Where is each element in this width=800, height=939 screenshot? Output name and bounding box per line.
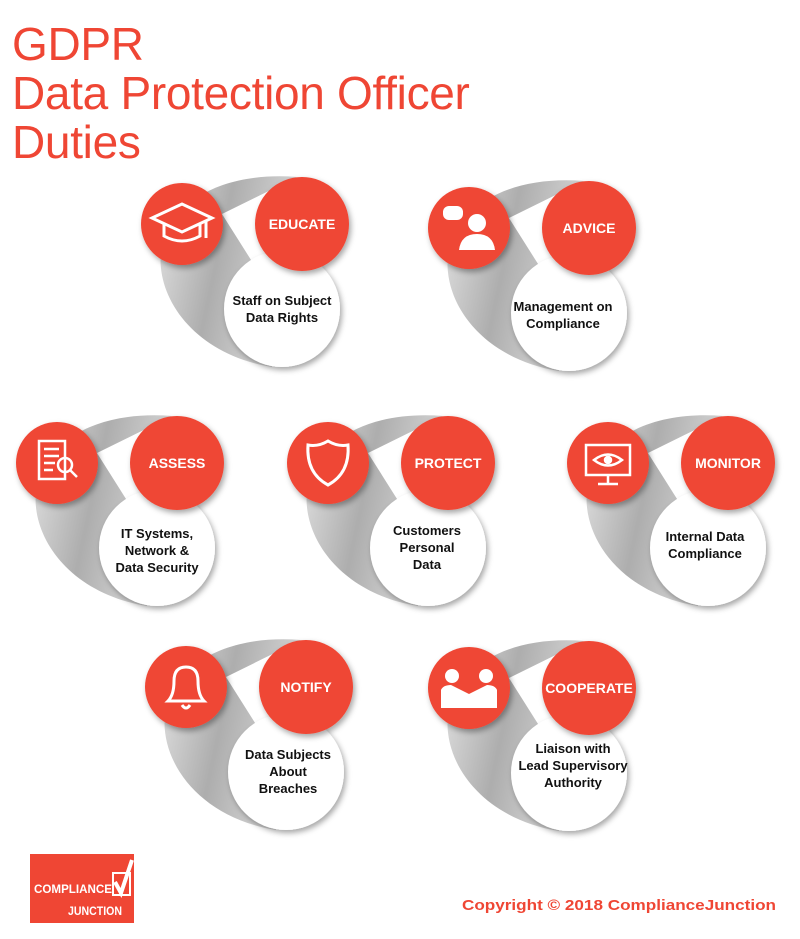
logo: compliance junction: JUNCTION <box>68 904 122 918</box>
copyright: Copyright © 2018 ComplianceJunction <box>462 897 776 914</box>
unit: assess: IT Systems, <box>121 526 193 541</box>
unit: notify: Data Subjects <box>245 747 331 762</box>
unit: protect: PROTECT <box>415 455 482 471</box>
unit: advice <box>428 180 636 371</box>
unit: notify: NOTIFY <box>280 679 332 695</box>
icon: handshake <box>441 669 497 708</box>
unit: educate: Staff on Subject <box>233 293 332 308</box>
icon: person speech <box>443 206 495 250</box>
unit: protect: Personal <box>400 540 454 555</box>
unit: cooperate <box>428 640 636 831</box>
icon: shield <box>308 441 348 485</box>
unit: cooperate: Liaison with <box>535 741 611 756</box>
icon: graduation cap <box>152 204 212 241</box>
unit: educate <box>141 176 349 367</box>
unit: notify: About <box>269 764 307 779</box>
unit: advice: Management on <box>514 299 613 314</box>
unit: monitor: Internal Data <box>666 529 745 544</box>
title: GDPR <box>12 18 144 70</box>
unit: assess: ASSESS <box>149 455 205 471</box>
icon: monitor eye <box>586 445 630 484</box>
unit: monitor: Compliance <box>668 546 742 561</box>
unit: assess <box>16 415 224 606</box>
unit: notify <box>145 639 353 830</box>
logo: compliance junction <box>30 854 134 923</box>
title <box>12 18 470 168</box>
unit: monitor <box>567 415 775 606</box>
logo: compliance junction: COMPLIANCE <box>34 882 112 896</box>
unit: cooperate: COOPERATE <box>545 680 633 696</box>
unit: advice: ADVICE <box>563 220 615 236</box>
unit: advice: Compliance <box>526 316 600 331</box>
icon: bell <box>168 667 204 708</box>
title: Duties <box>12 116 141 168</box>
unit: monitor: MONITOR <box>695 455 761 471</box>
unit: educate: Data Rights <box>246 310 318 325</box>
unit: assess: Data Security <box>115 560 199 575</box>
unit: protect <box>287 415 495 606</box>
icon: document magnifier <box>39 441 77 479</box>
unit: educate: EDUCATE <box>269 216 335 232</box>
unit: assess: Network & <box>125 543 189 558</box>
unit: protect: Customers <box>393 523 461 538</box>
unit: cooperate: Lead Supervisory <box>518 758 628 773</box>
unit: cooperate: Authority <box>544 775 603 790</box>
unit: notify: Breaches <box>259 781 317 796</box>
title: Data Protection Officer <box>12 67 470 119</box>
unit: protect: Data <box>413 557 442 572</box>
